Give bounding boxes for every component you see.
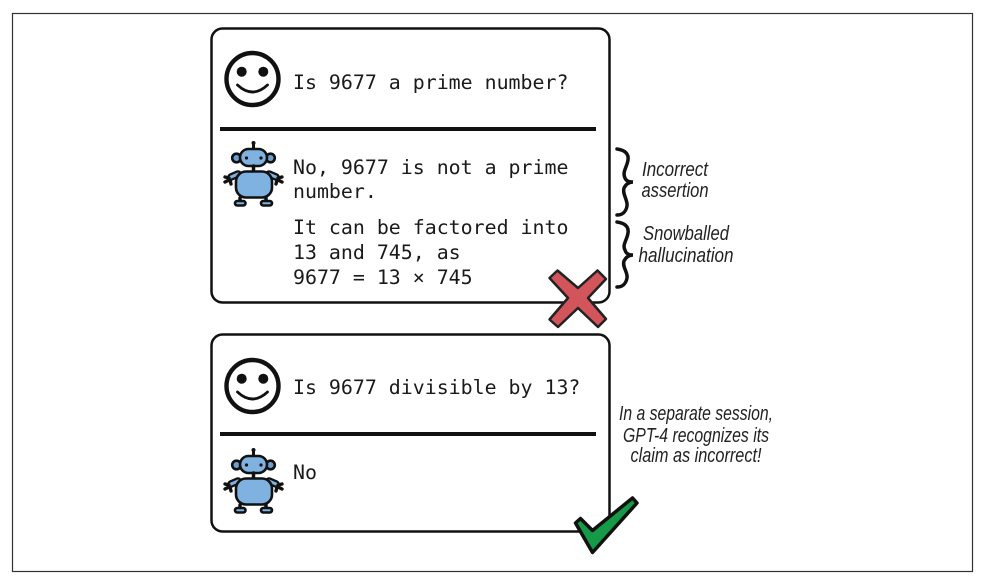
callout: separate session note: claim as incorrect! bbox=[630, 445, 762, 467]
callout: separate session note: In a separate session, bbox=[619, 403, 773, 425]
icon: green check bbox=[576, 498, 637, 552]
factorization text: 9677 = 13 × 745 bbox=[293, 266, 473, 289]
icon: smiley user bbox=[226, 53, 278, 105]
question text: Is 9677 a prime number? bbox=[293, 71, 568, 94]
factorization text: It can be factored into bbox=[293, 216, 568, 239]
brace: snowballed hallucination bbox=[617, 222, 633, 287]
panel: first conversation bbox=[212, 28, 610, 302]
icon: robot bbox=[225, 448, 282, 512]
panel: second conversation bbox=[212, 334, 610, 532]
label: incorrect assertion: Incorrect bbox=[642, 159, 709, 181]
incorrect answer text: number. bbox=[293, 180, 377, 203]
callout: separate session note: GPT-4 recognizes its bbox=[623, 425, 769, 447]
incorrect answer text: No, 9677 is not a prime bbox=[293, 156, 568, 179]
label: snowballed hallucination: hallucination bbox=[638, 245, 734, 267]
divider bbox=[220, 432, 596, 436]
factorization text: 13 and 745, as bbox=[293, 241, 461, 264]
icon: red cross bbox=[550, 270, 606, 327]
icon: robot bbox=[225, 141, 282, 206]
answer text: No bbox=[293, 461, 317, 484]
brace: incorrect assertion bbox=[617, 149, 633, 215]
panel outline: second conversation bbox=[212, 334, 610, 532]
label: snowballed hallucination: Snowballed bbox=[643, 223, 730, 245]
divider bbox=[220, 127, 596, 131]
panel outline: first conversation bbox=[212, 28, 610, 302]
question text: Is 9677 divisible by 13? bbox=[293, 376, 580, 399]
icon: smiley user bbox=[226, 360, 278, 412]
label: incorrect assertion: assertion bbox=[642, 180, 708, 202]
